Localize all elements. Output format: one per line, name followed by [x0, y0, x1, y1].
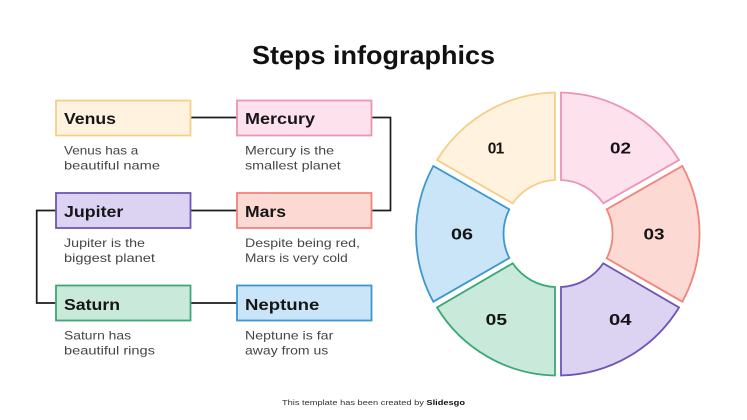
panel: Venus: Venus: [64, 111, 116, 128]
panel: Neptune: Neptune: [245, 297, 319, 314]
segment 01: [437, 92, 555, 203]
panel: Mars: Mars is very cold: [245, 251, 348, 265]
panel: Mercury: Mercury is the: [245, 144, 335, 158]
panel: Jupiter: Jupiter: [64, 204, 123, 221]
footer credit: This template has been created by Slidesgo: [282, 398, 465, 407]
segment 05: [437, 263, 555, 376]
segment 04: 04: [609, 312, 632, 329]
segment 06: 06: [451, 226, 473, 244]
segment 02: [561, 92, 679, 203]
panel: Jupiter: [56, 193, 190, 265]
panel: Saturn: Saturn has: [64, 328, 131, 342]
segment 03: 03: [644, 226, 665, 244]
panel: Mars: Mars: [245, 204, 286, 221]
segment 05: 05: [486, 312, 507, 329]
segment 01: 01: [488, 140, 505, 158]
panel: Mercury: Mercury: [245, 111, 315, 128]
panel: Venus: beautiful name: [64, 158, 161, 172]
panel: Mercury: smallest planet: [245, 158, 342, 172]
segment 02: 02: [610, 140, 631, 158]
segment 04: [561, 263, 679, 376]
panel: Saturn: [56, 286, 190, 358]
title: Steps infographics: [252, 40, 495, 70]
panel: Mercury: [237, 100, 372, 172]
connector lines: [37, 118, 390, 303]
panel: Saturn: beautiful rings: [64, 344, 155, 358]
panel: Saturn: Saturn: [64, 297, 120, 314]
segment 03: [607, 166, 700, 302]
panel: Venus: [56, 100, 190, 172]
panel: Mars: [237, 193, 372, 265]
panel: Neptune: away from us: [245, 344, 328, 358]
segment 06: [416, 166, 509, 302]
panel: Jupiter: biggest planet: [64, 251, 156, 265]
donut chart: [416, 92, 700, 376]
panel: Jupiter: Jupiter is the: [64, 236, 146, 250]
panel: Neptune: [237, 286, 372, 358]
panel: Mars: Despite being red,: [245, 236, 360, 250]
panel: Venus: Venus has a: [64, 144, 139, 158]
panel: Neptune: Neptune is far: [245, 328, 333, 342]
